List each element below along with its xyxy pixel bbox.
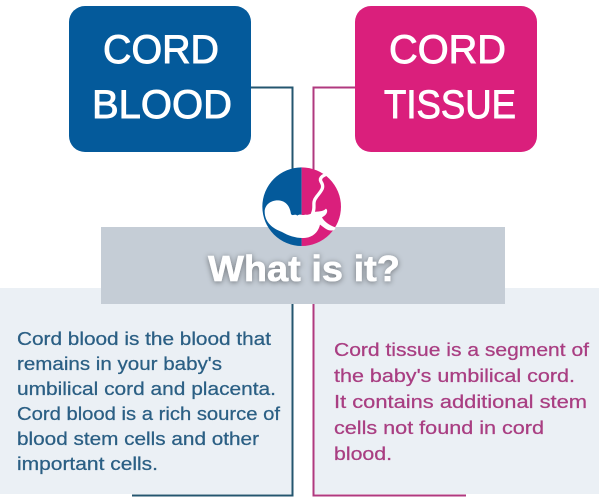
- panel: cord tissue description: [313, 288, 599, 494]
- text: cord blood description: important cells.: [17, 454, 158, 474]
- text: cord blood description: [17, 329, 281, 474]
- text: cord blood description: Cord blood is the blood that: [17, 329, 271, 349]
- box: cord tissue: [355, 6, 537, 152]
- text: cord blood description: Cord blood is a rich source of: [17, 404, 281, 424]
- panel: cord blood description: [0, 288, 292, 494]
- box: cord tissue: CORD: [389, 28, 506, 72]
- text: cord tissue description: [334, 340, 590, 464]
- text: cord tissue description: Cord tissue is a segment of: [334, 340, 590, 360]
- text: cord tissue description: blood.: [334, 444, 392, 464]
- box: cord blood: CORD: [103, 28, 219, 72]
- text: cord tissue description: It contains additional stem: [334, 392, 587, 412]
- text: cord tissue description: the baby's umbilical cord.: [334, 366, 575, 386]
- box: cord blood: [69, 6, 251, 152]
- text: cord tissue description: cells not found in cord: [334, 418, 544, 438]
- connector: cord tissue line: [314, 88, 466, 496]
- text: cord blood description: blood stem cells and other: [17, 429, 259, 449]
- banner: what is it: What is it?: [208, 248, 400, 289]
- connector: cord blood line: [132, 88, 292, 496]
- text: cord blood description: remains in your baby's: [17, 354, 222, 374]
- box: cord blood: BLOOD: [92, 83, 232, 127]
- icon: fetus in two-tone circle: [262, 167, 341, 246]
- text: cord blood description: umbilical cord and placenta.: [17, 379, 276, 399]
- box: cord tissue: TISSUE: [384, 83, 516, 127]
- banner: what is it: [101, 227, 505, 304]
